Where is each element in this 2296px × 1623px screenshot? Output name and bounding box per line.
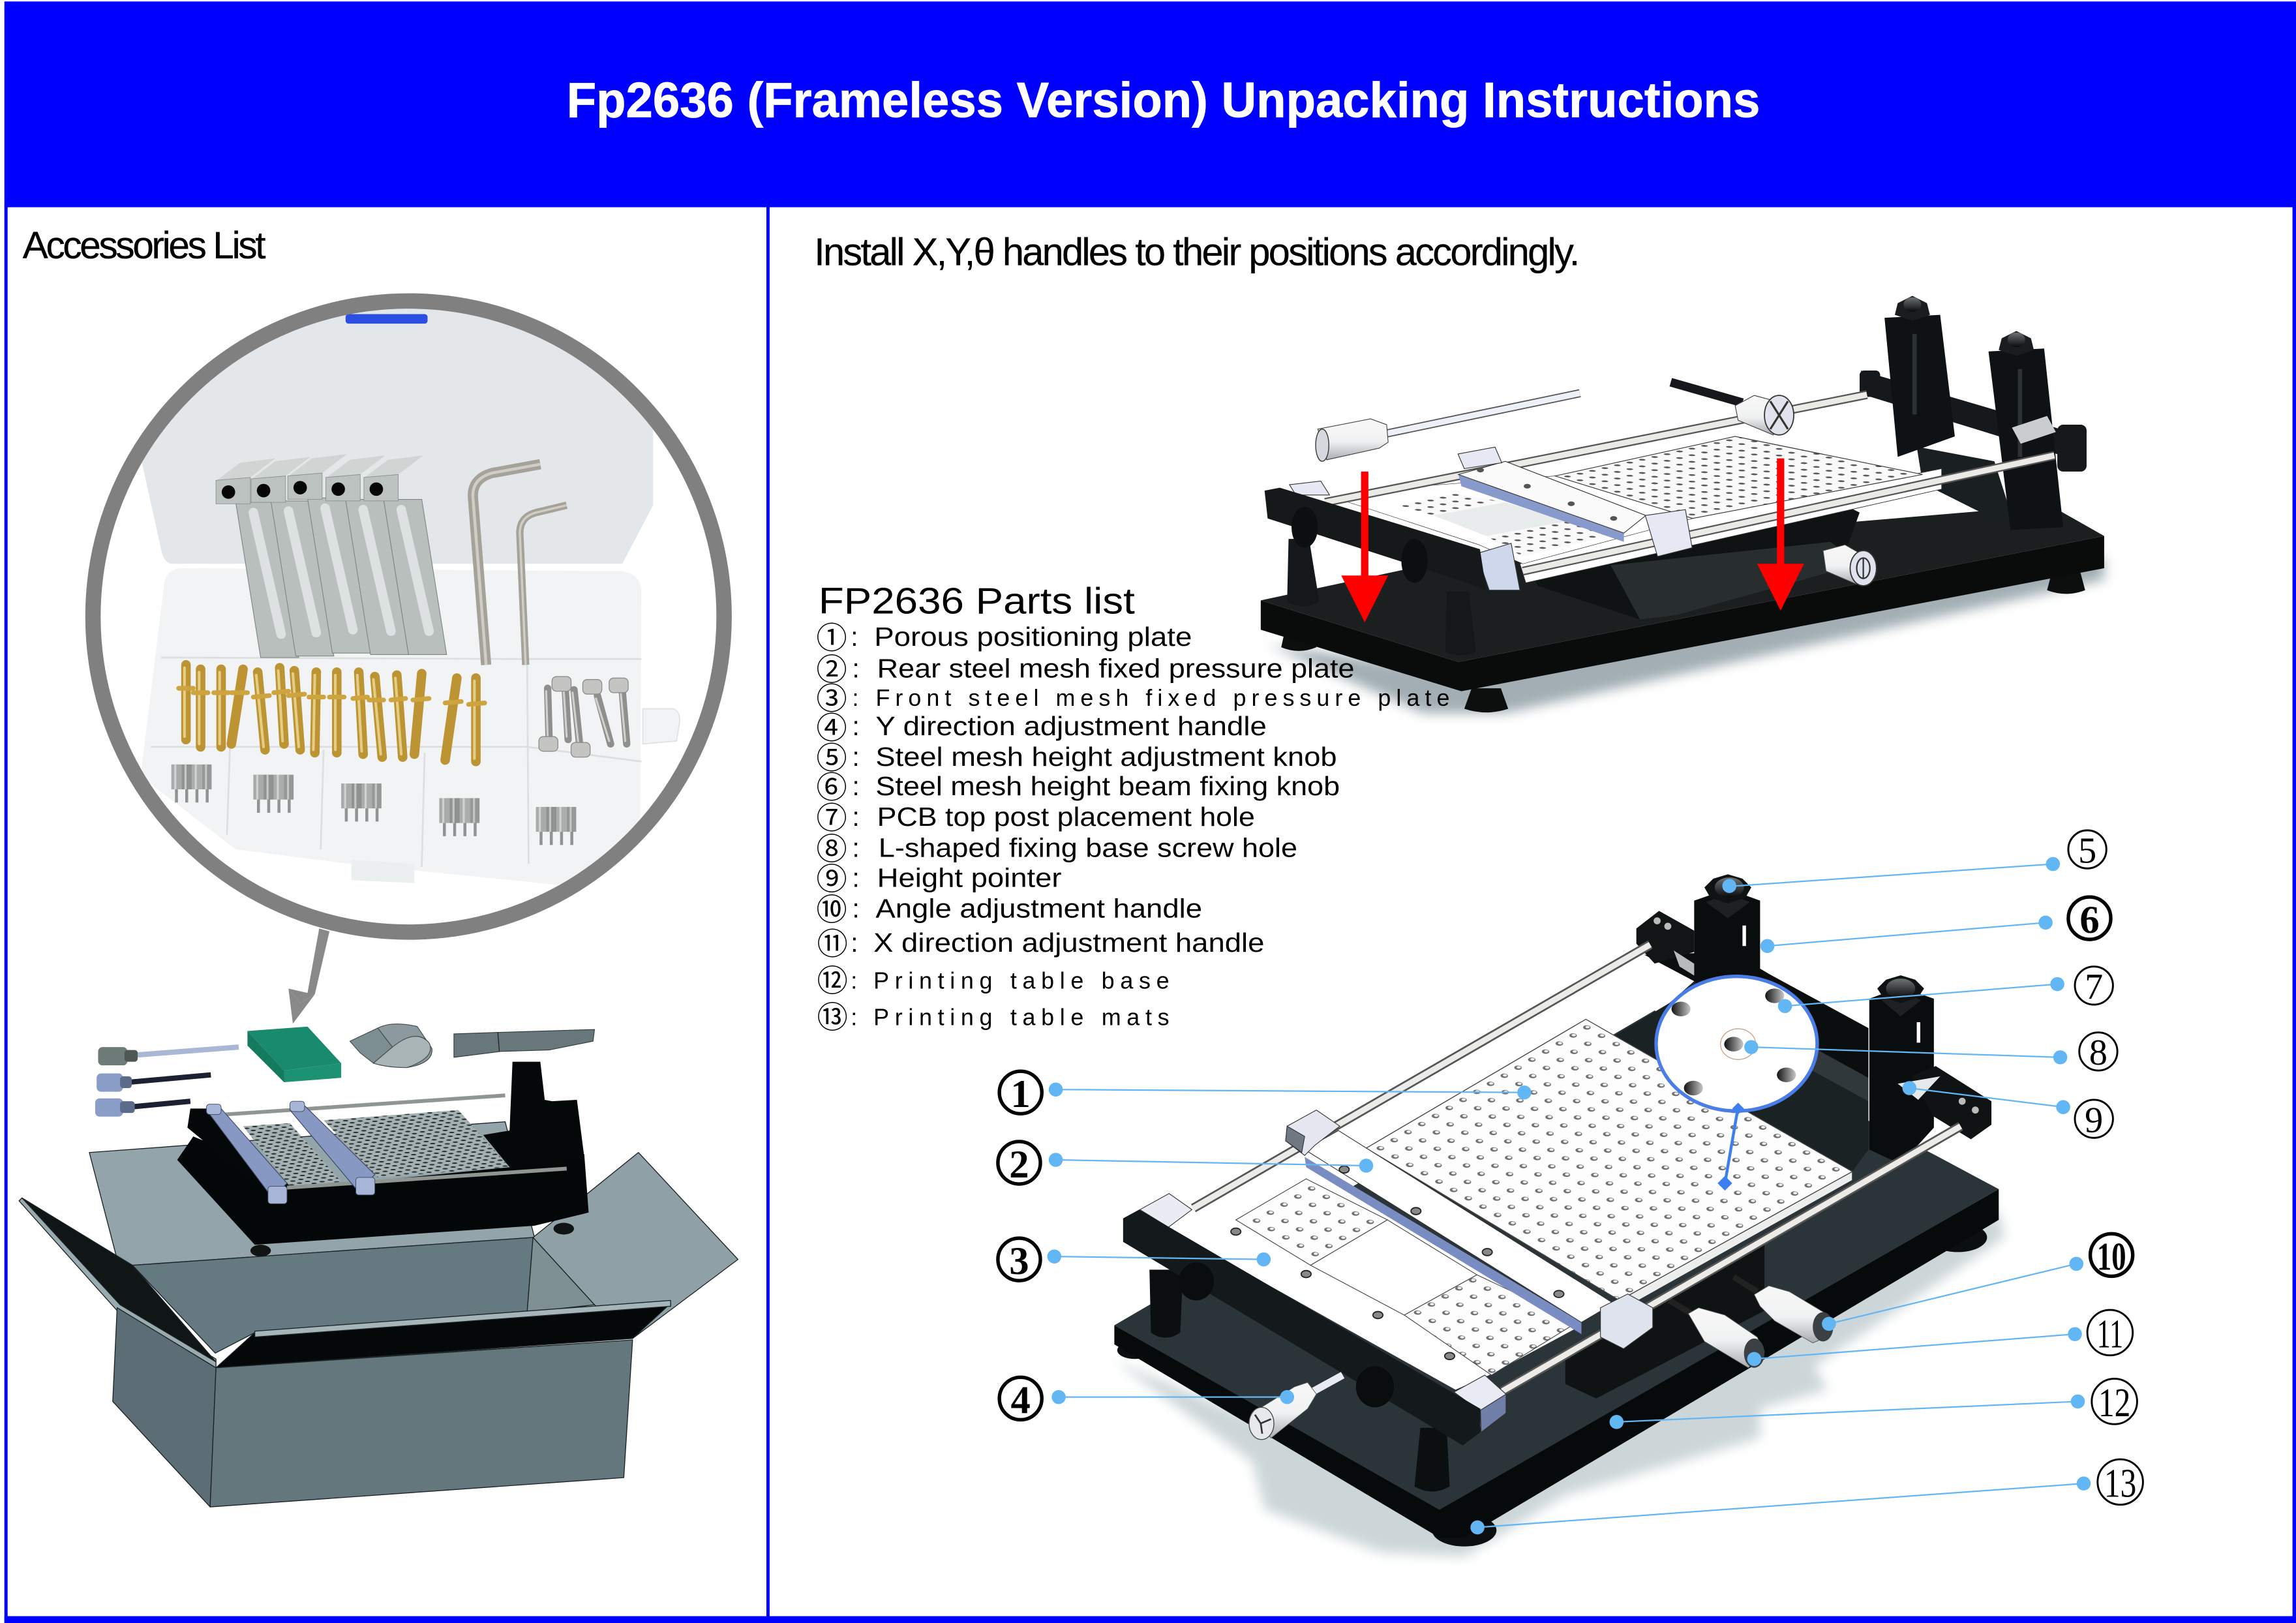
heading: accessories list: Accessories List bbox=[23, 224, 265, 267]
small printer plate bbox=[324, 1110, 509, 1177]
part 11: : bbox=[851, 928, 858, 958]
part 6: : bbox=[853, 771, 860, 801]
part 4: : bbox=[853, 711, 860, 741]
callout 3 bbox=[998, 1238, 1271, 1283]
callout 11 bbox=[1747, 1310, 2133, 1366]
part 1: ① bbox=[817, 621, 847, 656]
rods bbox=[1194, 945, 1961, 1391]
base bbox=[1261, 536, 2104, 691]
header banner bbox=[5, 1, 2296, 207]
magnified accessories box photo bbox=[88, 293, 732, 945]
callout 3: 3 bbox=[1009, 1239, 1029, 1283]
x handle bbox=[1670, 382, 1794, 435]
callout 2: 2 bbox=[1009, 1143, 1029, 1187]
callout 12 bbox=[1610, 1379, 2137, 1429]
undercarriage bbox=[1523, 491, 1860, 620]
part 6 bbox=[817, 770, 1340, 804]
part 13: ⑬ bbox=[817, 1000, 848, 1035]
part 5: Steel mesh height adjustment knob bbox=[875, 742, 1337, 772]
part 6: ⑥ bbox=[817, 770, 847, 804]
callout 6: 6 bbox=[2079, 898, 2100, 942]
drop shadow bbox=[1114, 1208, 2004, 1556]
steel screws bbox=[539, 676, 628, 757]
part 1: Porous positioning plate bbox=[874, 622, 1192, 652]
part 9: ⑨ bbox=[817, 862, 847, 896]
box left flap bbox=[22, 1198, 216, 1362]
plastic box interior bbox=[142, 309, 680, 885]
part 3: Front steel mesh fixed pressure plate bbox=[875, 684, 1449, 711]
box back wall bbox=[132, 1237, 533, 1353]
part 2 bbox=[817, 652, 1355, 687]
parts list heading: FP2636 Parts list bbox=[819, 581, 1135, 622]
part 2: Rear steel mesh fixed pressure plate bbox=[877, 653, 1355, 683]
callout 7: 7 bbox=[2085, 967, 2103, 1007]
callout 5 bbox=[1722, 830, 2106, 893]
part 11 bbox=[817, 927, 1264, 962]
mats bbox=[1117, 1223, 1987, 1547]
box front face bbox=[210, 1340, 633, 1507]
part 11: X direction adjustment handle bbox=[873, 928, 1264, 958]
callouts bbox=[998, 830, 2143, 1534]
part 6: Steel mesh height beam fixing knob bbox=[875, 771, 1340, 801]
brass pins bbox=[179, 665, 485, 761]
part 13: Printing table mats bbox=[873, 1003, 1170, 1030]
left tower knob bbox=[1704, 874, 1751, 903]
porous plate side bbox=[1620, 1172, 1852, 1308]
undercarriage platform bbox=[1610, 542, 1860, 620]
part 10 bbox=[817, 892, 1202, 927]
angle handle bbox=[1823, 545, 1877, 586]
right leg bbox=[1415, 1428, 1449, 1491]
part 1: : bbox=[851, 622, 858, 652]
small pins groups bbox=[172, 765, 576, 845]
x handle bbox=[1669, 1300, 1764, 1368]
front plate screws bbox=[1231, 1228, 1455, 1359]
part 2: ② bbox=[817, 652, 847, 687]
front perforated right bbox=[1404, 1275, 1577, 1375]
box front flap bbox=[216, 1303, 671, 1368]
callout 2 bbox=[998, 1142, 1373, 1187]
part 7: ⑦ bbox=[817, 801, 847, 836]
callout 4 bbox=[999, 1377, 1294, 1422]
small printer base bbox=[177, 1136, 588, 1245]
callout 7 bbox=[1778, 967, 2113, 1013]
part 8: L-shaped fixing base screw hole bbox=[879, 832, 1297, 862]
callout 8 bbox=[1744, 1033, 2117, 1073]
red arrow right bbox=[1757, 459, 1804, 611]
porous positioning plate bbox=[1366, 1019, 1852, 1300]
top printer illustration bbox=[1261, 296, 2104, 713]
small printer towers bbox=[483, 1062, 584, 1167]
accessories box: green box bbox=[247, 1027, 341, 1082]
title: Fp2636 (Frameless Version) Unpacking Instructions bbox=[567, 73, 1760, 129]
small printer bars bbox=[207, 1108, 287, 1198]
y handle bbox=[1316, 393, 1580, 461]
main printer illustration bbox=[1114, 874, 2004, 1556]
scraper long bbox=[454, 1029, 594, 1057]
box right flap bbox=[533, 1153, 738, 1339]
callout 4: 4 bbox=[1011, 1378, 1031, 1422]
part 8 bbox=[817, 832, 1297, 866]
callout 1: 1 bbox=[1011, 1072, 1031, 1116]
feet bbox=[1281, 568, 2085, 712]
small printer rail bbox=[187, 1108, 290, 1209]
front rail bbox=[1265, 488, 1487, 590]
part 2: : bbox=[853, 653, 860, 683]
base side bbox=[1114, 1189, 1999, 1538]
handle 3 bbox=[95, 1099, 190, 1117]
red arrow left bbox=[1341, 472, 1388, 622]
callout 11: 11 bbox=[2097, 1311, 2123, 1356]
small printer feet bbox=[250, 1223, 574, 1256]
callout 9 bbox=[1903, 1081, 2113, 1140]
small printer in box bbox=[177, 1062, 588, 1256]
part 8: : bbox=[853, 832, 860, 862]
base inner dark bbox=[1615, 961, 1868, 1172]
left tower bbox=[1694, 889, 1760, 1010]
callout 10 bbox=[1822, 1234, 2133, 1331]
scraper curved bbox=[350, 1024, 432, 1068]
parts list bbox=[817, 581, 1449, 1035]
part 10: ⑩ bbox=[817, 892, 847, 927]
callout 1 bbox=[999, 1071, 1532, 1116]
callout 9: 9 bbox=[2085, 1100, 2103, 1140]
callout 6 bbox=[1760, 897, 2111, 953]
part 4 bbox=[817, 711, 1267, 746]
hex keys bbox=[473, 464, 567, 665]
small printer rods bbox=[226, 1095, 567, 1188]
front perforated left bbox=[1236, 1179, 1387, 1266]
part 12: Printing table base bbox=[873, 967, 1170, 994]
callout 10: 10 bbox=[2097, 1235, 2126, 1279]
part 12 bbox=[817, 963, 1170, 998]
part 7: PCB top post placement hole bbox=[877, 802, 1255, 832]
box front flap edge bbox=[255, 1300, 671, 1337]
part 13: : bbox=[851, 1003, 857, 1030]
front plate inner outline bbox=[1310, 1220, 1477, 1315]
part 8: ⑧ bbox=[817, 832, 847, 866]
part 5: : bbox=[853, 742, 860, 772]
y handle bbox=[1249, 1375, 1343, 1440]
instruction heading: Install X,Y,θ handles to their positions accordingly. bbox=[814, 230, 1580, 273]
base top bbox=[1114, 1010, 1999, 1510]
right tower bbox=[1869, 987, 1934, 1164]
part 10: Angle adjustment handle bbox=[875, 893, 1202, 923]
callout 5: 5 bbox=[2078, 830, 2096, 871]
part 12: ⑫ bbox=[817, 963, 848, 998]
handle 2 bbox=[97, 1074, 211, 1092]
part 3: : bbox=[853, 684, 859, 711]
magnifier ring bbox=[93, 301, 724, 932]
callout 12: 12 bbox=[2098, 1380, 2130, 1425]
front white plate bbox=[1173, 1157, 1581, 1389]
part 9 bbox=[817, 862, 1062, 896]
callout 13: 13 bbox=[2104, 1460, 2136, 1506]
part 4: ④ bbox=[817, 711, 847, 746]
part 9: Height pointer bbox=[877, 862, 1062, 892]
part 7 bbox=[817, 801, 1255, 836]
towers and beams bbox=[1860, 296, 2087, 530]
part 12: : bbox=[851, 967, 857, 994]
right tower knob bbox=[1877, 975, 1924, 1003]
part 9: : bbox=[853, 862, 860, 892]
small printer front plate bbox=[243, 1123, 341, 1186]
arrow: magnifier to green box bbox=[288, 928, 329, 1024]
carriage block bbox=[1565, 1245, 1764, 1399]
rail knobs bbox=[1292, 507, 1428, 583]
detail magnifier bbox=[1656, 977, 1817, 1191]
aluminium brackets bbox=[216, 454, 447, 658]
box left flap edge bbox=[19, 1198, 216, 1371]
rear pressure bar bbox=[1458, 461, 1646, 542]
legs bbox=[1287, 539, 1476, 656]
part 5: ⑤ bbox=[817, 741, 847, 776]
box back flap bbox=[89, 1122, 534, 1266]
rods bbox=[1325, 395, 2055, 571]
part 10: : bbox=[853, 893, 860, 923]
part 3: ③ bbox=[817, 682, 847, 716]
clamps bbox=[1140, 1110, 1653, 1433]
box left face bbox=[113, 1308, 216, 1507]
back beams bbox=[1644, 952, 1868, 1101]
shadow bbox=[1268, 556, 2104, 713]
rear pressure bar bbox=[1305, 1130, 1614, 1334]
front rail bbox=[1123, 1209, 1481, 1446]
right mount and height pointer bbox=[1897, 1066, 1991, 1140]
rail knobs bbox=[1179, 1262, 1394, 1407]
open cardboard box bbox=[19, 1122, 738, 1507]
callout 8: 8 bbox=[2089, 1033, 2107, 1073]
part 5 bbox=[817, 741, 1337, 776]
left leg bbox=[1149, 1269, 1183, 1338]
plate assembly bbox=[1335, 436, 1942, 583]
part 11: ⑪ bbox=[817, 927, 848, 962]
small printer clamps bbox=[207, 1101, 375, 1204]
angle handle right bbox=[1734, 1277, 1834, 1343]
part 7: : bbox=[853, 802, 860, 832]
part 13 bbox=[817, 1000, 1170, 1035]
part 4: Y direction adjustment handle bbox=[875, 711, 1267, 741]
left rear mount bbox=[1637, 911, 1699, 978]
box right inner wall bbox=[527, 1237, 594, 1312]
callout 13 bbox=[1470, 1459, 2143, 1534]
part 1 bbox=[817, 621, 1192, 656]
handle 1 bbox=[98, 1047, 239, 1065]
clamps bbox=[1290, 447, 1692, 590]
